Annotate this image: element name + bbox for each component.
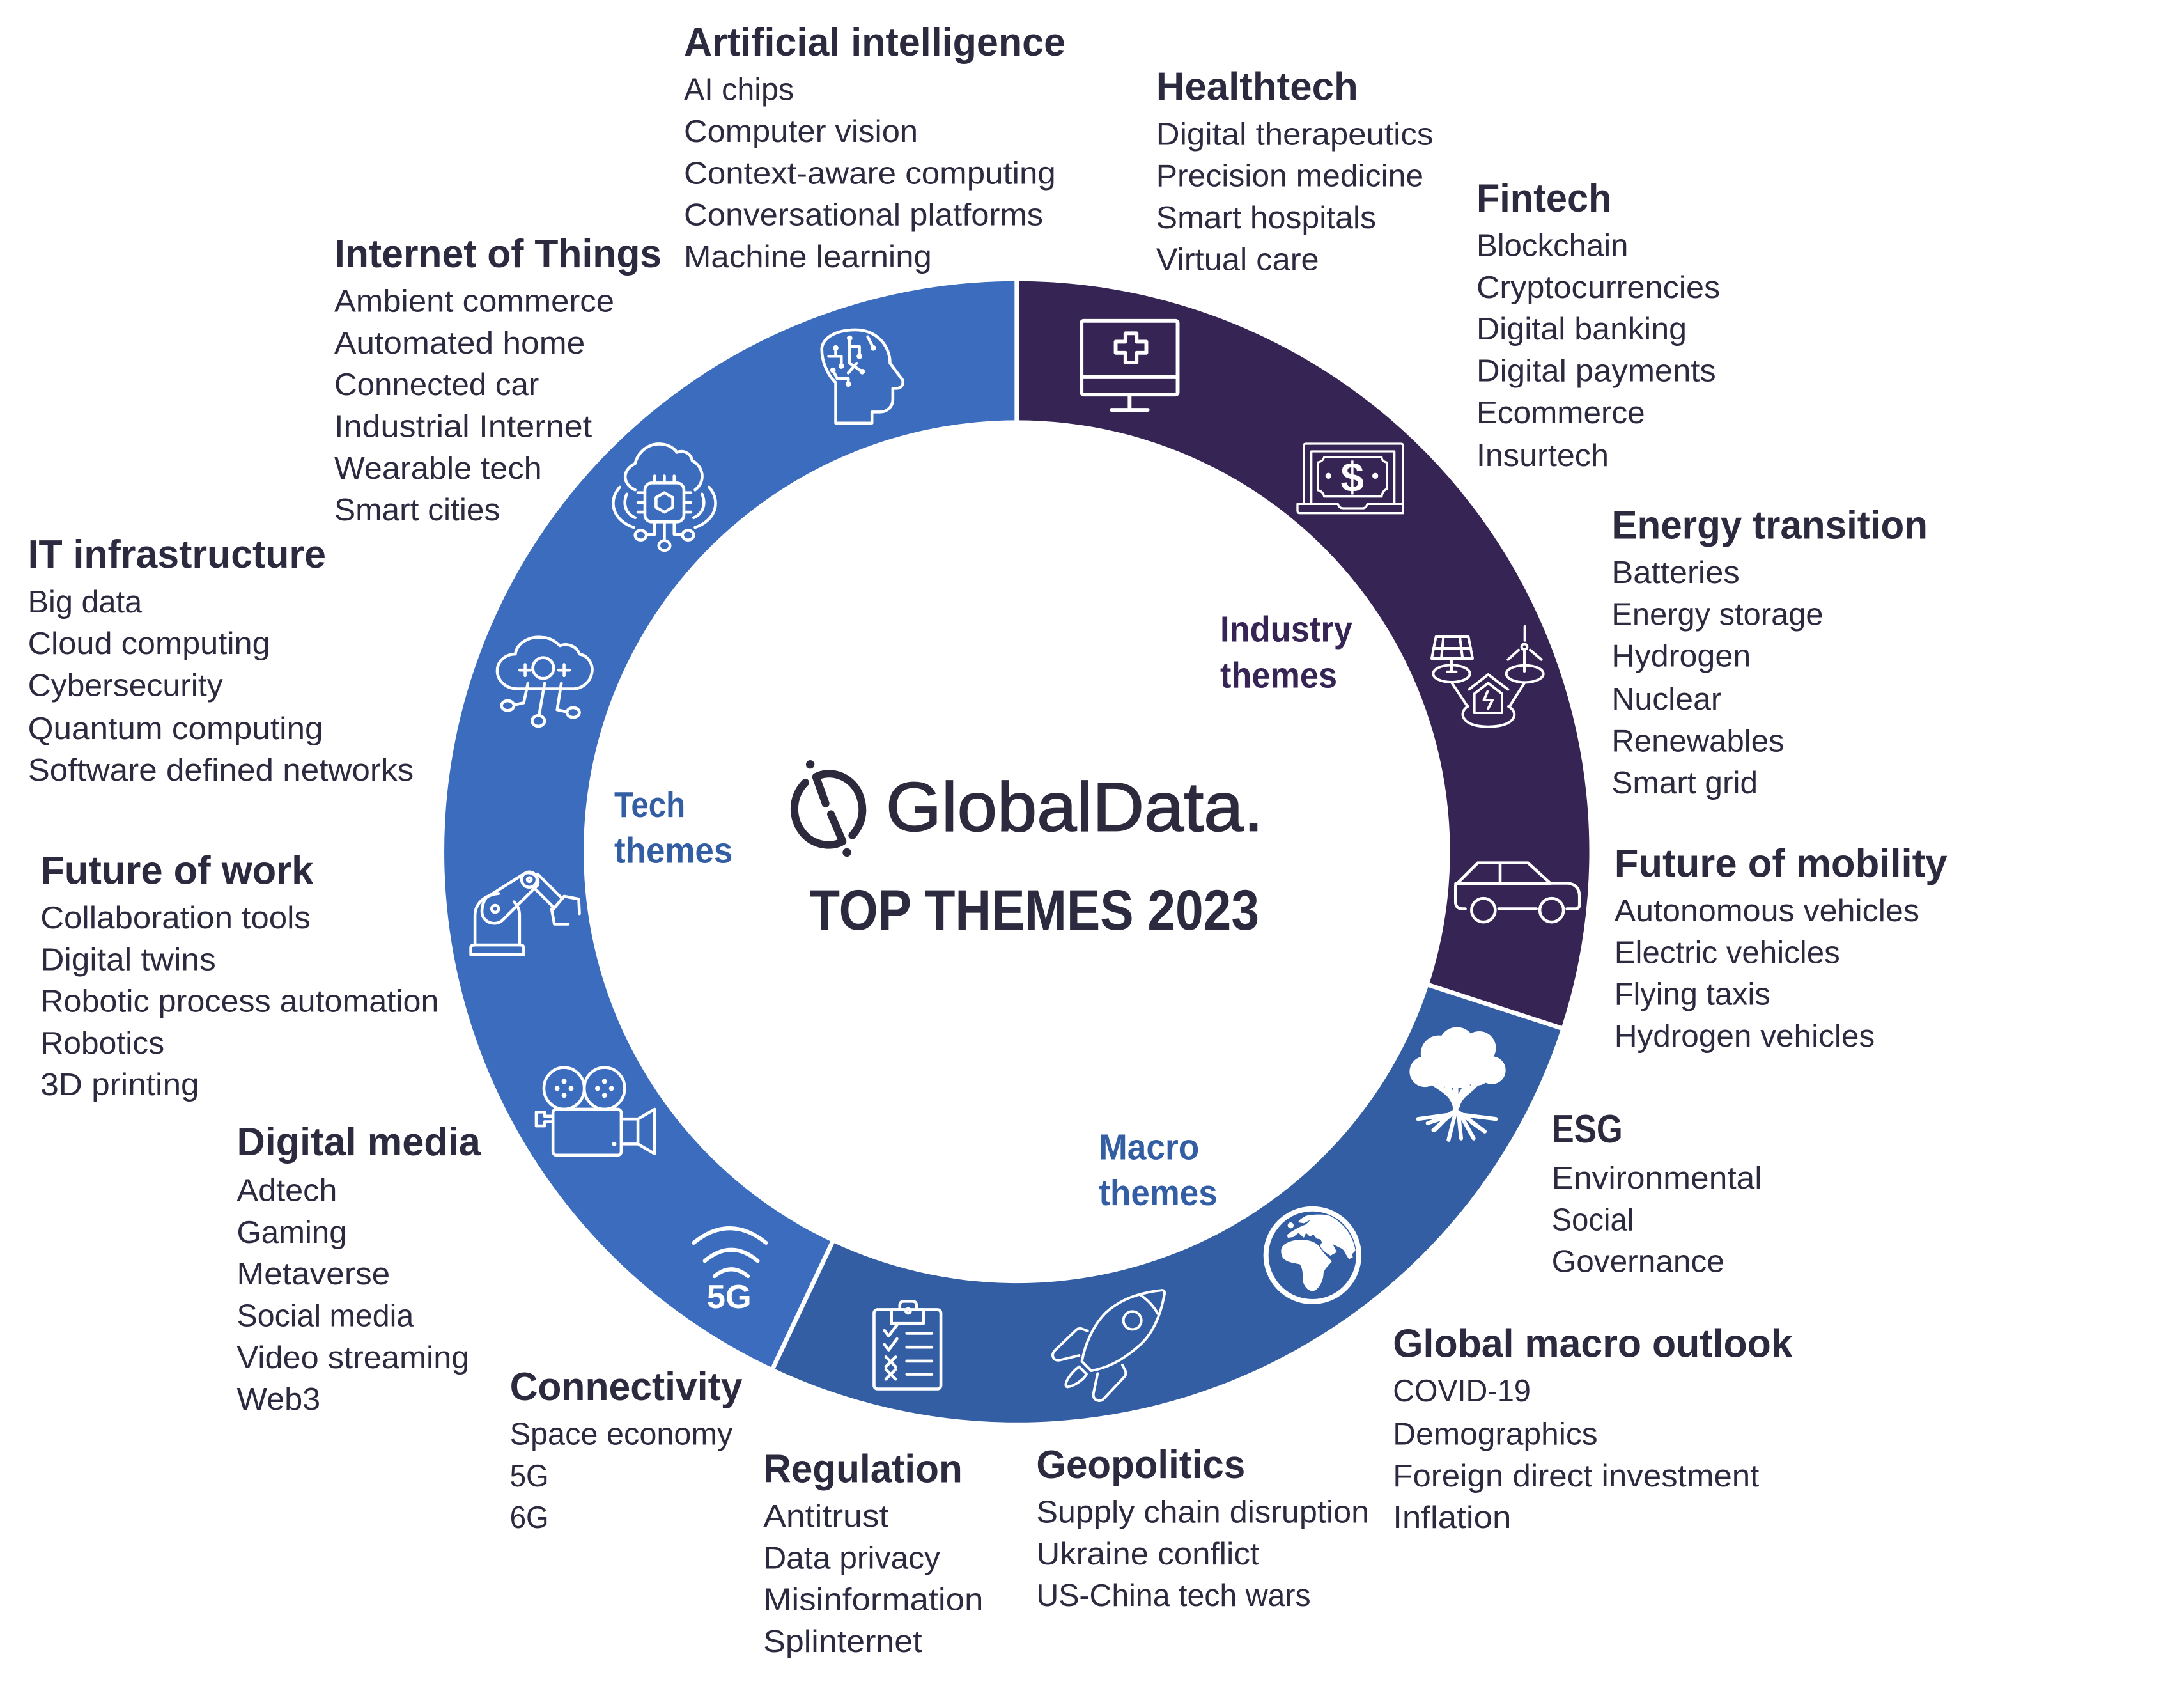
label: tech themes: Tech [614, 784, 685, 825]
text block: Artificial intelligence: Conversational platforms [684, 198, 1043, 233]
text block: Healthtech: Smart hospitals [1156, 201, 1376, 235]
text block: Energy transition: Hydrogen [1611, 639, 1751, 674]
text block: Artificial intelligence: Computer vision [684, 114, 918, 149]
text block: Internet of Things: Automated home [334, 326, 585, 361]
text block: Energy transition: Renewables [1611, 724, 1785, 758]
text block: Connectivity: 6G [510, 1501, 549, 1535]
text block: Digital media: Web3 [236, 1382, 320, 1417]
text block: Geopolitics [1036, 1443, 1369, 1613]
icon: globe (global macro outlook) [1266, 1209, 1359, 1302]
text block: ESG: Environmental [1552, 1161, 1762, 1196]
text block: Energy transition: Batteries [1611, 556, 1740, 590]
text block: Digital media: Social media [236, 1299, 414, 1334]
text block: Digital media [236, 1120, 481, 1417]
text block: IT infrastructure: Cybersecurity [28, 668, 223, 703]
text block: Regulation: Misinformation [763, 1583, 984, 1618]
text block: IT infrastructure: Software defined networks [28, 753, 414, 788]
icon: movie camera (digital media) [536, 1068, 654, 1155]
text block: Fintech: Fintech [1476, 176, 1611, 221]
text block: Energy transition: Energy storage [1611, 597, 1824, 632]
text block: Artificial intelligence [684, 20, 1065, 274]
text block: Future of mobility: Future of mobility [1615, 841, 1948, 885]
text block: IT infrastructure: Quantum computing [28, 712, 323, 746]
logo mark [794, 760, 862, 857]
icon: 5G signal (connectivity) [693, 1228, 766, 1316]
icon: robotic arm (future of work) [471, 872, 580, 955]
text block: ESG: Governance [1552, 1245, 1724, 1279]
text block: Global macro outlook: Global macro outlook [1393, 1321, 1793, 1366]
text block: Connectivity: 5G [510, 1459, 549, 1493]
text block: Connectivity: Space economy [510, 1417, 733, 1452]
text block: Energy transition: Nuclear [1611, 682, 1722, 717]
label: tech themes [614, 784, 732, 871]
ring chart [444, 277, 1590, 1423]
ring segment: macro themes [773, 985, 1561, 1423]
text block: Future of mobility [1615, 841, 1948, 1054]
text block: Future of work: 3D printing [40, 1068, 199, 1102]
text block: Future of work: Collaboration tools [40, 901, 311, 935]
icon: laptop with banknote (fintech) [1297, 444, 1403, 513]
text block: ESG: ESG [1552, 1107, 1623, 1151]
label: industry themes: Industry [1220, 609, 1352, 650]
text block: Healthtech: Precision medicine [1156, 159, 1423, 194]
text block: Artificial intelligence: Context-aware computing [684, 156, 1056, 191]
text block: Internet of Things: Connected car [334, 368, 539, 402]
text block: Future of work: Future of work [40, 848, 314, 893]
icon: energy system solar wind house (energy transition) [1432, 627, 1544, 727]
icon: cloud chip (internet of things) [613, 444, 716, 550]
icon: medical monitor (healthtech) [1081, 321, 1178, 410]
text block: Fintech: Cryptocurrencies [1476, 270, 1720, 305]
text block: Future of work: Robotics [40, 1026, 164, 1061]
text block: Digital media: Gaming [236, 1215, 347, 1250]
text block: ESG: Social [1552, 1203, 1634, 1237]
text block: Regulation [763, 1447, 984, 1659]
text block: Fintech: Digital payments [1476, 354, 1716, 388]
text block: Global macro outlook: COVID-19 [1393, 1374, 1531, 1408]
text block: IT infrastructure [28, 533, 414, 788]
text block: Digital media: Metaverse [236, 1257, 390, 1291]
text block: Energy transition: Energy transition [1611, 503, 1928, 547]
text block: Artificial intelligence: Artificial intelligence [684, 20, 1065, 65]
logo: GlobalData [794, 760, 1264, 857]
text block: Artificial intelligence: AI chips [684, 73, 794, 107]
text block: Internet of Things: Industrial Internet [334, 410, 592, 444]
text block: Regulation: Splinternet [763, 1625, 922, 1659]
text block: Geopolitics: Ukraine conflict [1036, 1537, 1259, 1571]
text block: Energy transition [1611, 503, 1928, 800]
text block: IT infrastructure: IT infrastructure [28, 533, 326, 577]
text block: Global macro outlook [1393, 1321, 1793, 1535]
text block: Future of work: Robotic process automation [40, 985, 438, 1019]
title: TOP THEMES 2023 [809, 878, 1259, 942]
text block: Healthtech: Healthtech [1156, 65, 1358, 109]
text block: Internet of Things [334, 232, 662, 527]
text block: Regulation: Antitrust [763, 1499, 889, 1534]
label: industry themes: themes [1220, 655, 1337, 695]
text block: Future of mobility: Autonomous vehicles [1615, 894, 1919, 928]
text block: Internet of Things: Wearable tech [334, 451, 542, 486]
text block: Fintech: Insurtech [1476, 439, 1609, 473]
text block: Internet of Things: Smart cities [334, 493, 500, 527]
label: macro themes: Macro [1099, 1127, 1199, 1167]
logo wordmark: GlobalData. [886, 768, 1264, 846]
text block: Artificial intelligence: Machine learning [684, 240, 932, 274]
text block: Digital media: Digital media [236, 1120, 481, 1164]
ring segment: industry themes [1017, 281, 1590, 1028]
ring segment: tech themes [444, 281, 1017, 1368]
text block: Global macro outlook: Inflation [1393, 1501, 1511, 1535]
icon: rocket (geopolitics) [1053, 1290, 1165, 1401]
text block: Fintech: Digital banking [1476, 312, 1687, 347]
text block: Internet of Things: Ambient commerce [334, 285, 614, 319]
label: tech themes: themes [614, 830, 732, 871]
text block: IT infrastructure: Big data [28, 585, 143, 620]
label: macro themes: themes [1099, 1173, 1218, 1213]
icon: clipboard checklist (regulation) [874, 1301, 941, 1389]
text block: Global macro outlook: Foreign direct investment [1393, 1459, 1760, 1493]
icon: laptop with banknote (fintech): $ [1341, 453, 1364, 500]
icon: car (future of mobility) [1455, 863, 1579, 922]
text block: ESG [1552, 1107, 1762, 1279]
text block: Future of mobility: Electric vehicles [1615, 935, 1840, 970]
text block: Connectivity: Connectivity [510, 1365, 743, 1409]
text block: Future of mobility: Flying taxis [1615, 978, 1770, 1012]
text block: Future of work [40, 848, 438, 1102]
text block: Healthtech [1156, 65, 1433, 277]
text block: Fintech [1476, 176, 1720, 473]
text block: Fintech: Blockchain [1476, 229, 1628, 263]
text block: Connectivity [510, 1365, 743, 1535]
text block: Regulation: Regulation [763, 1447, 963, 1491]
text block: Geopolitics: Geopolitics [1036, 1443, 1245, 1487]
text block: Healthtech: Virtual care [1156, 242, 1319, 277]
text block: Future of work: Digital twins [40, 942, 216, 977]
icon: cloud network (IT infrastructure) [497, 637, 592, 726]
text block: Energy transition: Smart grid [1611, 766, 1758, 800]
label: industry themes [1220, 609, 1352, 695]
text block: Digital media: Video streaming [236, 1341, 469, 1375]
text block: Future of mobility: Hydrogen vehicles [1615, 1019, 1875, 1054]
text block: Geopolitics: Supply chain disruption [1036, 1495, 1369, 1529]
icon: tree with roots (ESG) [1409, 1027, 1506, 1140]
text block: Regulation: Data privacy [763, 1541, 940, 1575]
text block: Internet of Things: Internet of Things [334, 232, 662, 276]
text block: Geopolitics: US-China tech wars [1036, 1579, 1311, 1613]
icon: brain head (artificial intelligence) [822, 330, 903, 423]
text block: Healthtech: Digital therapeutics [1156, 117, 1433, 152]
label: macro themes [1099, 1127, 1218, 1213]
text block: Digital media: Adtech [236, 1174, 337, 1208]
text block: Global macro outlook: Demographics [1393, 1417, 1598, 1452]
text block: Fintech: Ecommerce [1476, 396, 1645, 430]
text block: IT infrastructure: Cloud computing [28, 627, 270, 661]
icon: 5G signal (connectivity): 5G [707, 1279, 752, 1316]
